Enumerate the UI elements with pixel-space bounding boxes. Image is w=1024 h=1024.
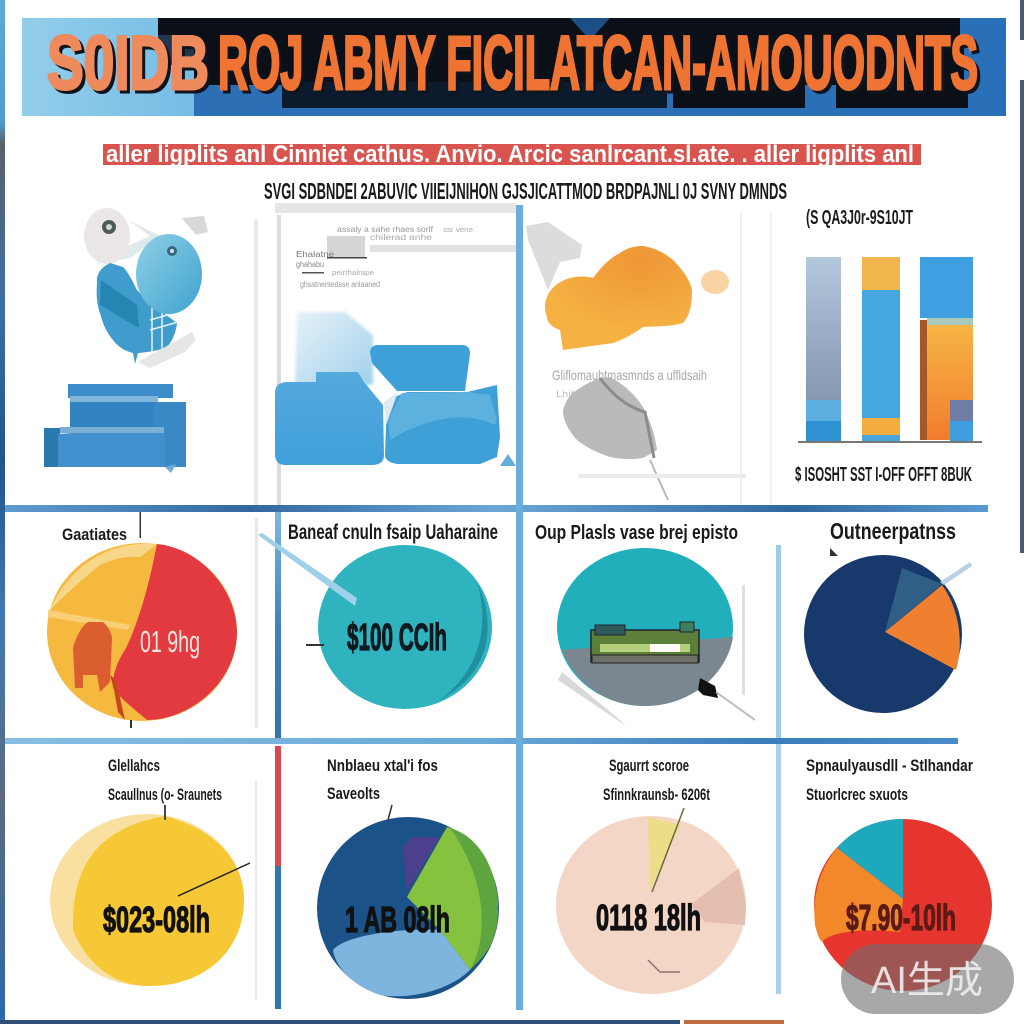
small arrow <box>500 454 516 466</box>
right blue folder <box>385 385 500 464</box>
bar 2 <box>862 257 900 442</box>
watermark: AI生成 <box>871 960 983 1002</box>
panel: pie red orange teal <box>806 756 992 991</box>
tiny captions block: ghahabu <box>296 260 324 269</box>
watermark <box>841 944 1014 1014</box>
icon: pale orange dot <box>701 270 729 294</box>
pie <box>317 817 499 999</box>
pie <box>804 555 962 713</box>
bar 1 <box>806 257 841 442</box>
clamp icon <box>698 678 718 698</box>
panel: orange blob illustration <box>526 222 746 500</box>
panel: pie teal and grey with train <box>535 522 755 726</box>
heading: Oup Plasls vase brej episto <box>535 522 738 544</box>
heading <box>108 756 222 804</box>
value label: $100 CCIh <box>347 617 447 659</box>
value label: 0118 18lh <box>596 897 701 938</box>
icon: grey lens disc <box>84 208 208 264</box>
faint noisy caption: Gliflomauhtmasmnds a uffldsaih <box>552 367 707 383</box>
icon: orange blob <box>545 246 692 350</box>
panel: pie navy green blue <box>317 756 499 999</box>
grid lines <box>5 205 988 1010</box>
icon: green train <box>591 622 699 663</box>
pie <box>814 819 992 991</box>
panel: pie navy and orange <box>804 518 972 713</box>
leader line <box>652 808 684 892</box>
chart heading: (S QA3J0r-9S10JT <box>806 207 913 229</box>
pie <box>556 816 746 994</box>
value label: 1 AB 08lh <box>345 899 450 940</box>
panel: stacked bar chart <box>795 207 982 486</box>
subtitle ribbon: aller ligplits anl Cinniet cathus. Anvio. Arcic sanlrcant.sl.ate. . aller ligplits anl <box>106 141 914 168</box>
heading <box>806 756 973 804</box>
heading: Stuorlcrec sxuots <box>806 785 908 804</box>
icon: stacked blue boxes <box>44 384 186 473</box>
heading: Scaullnus (o- Sraunets <box>108 785 222 804</box>
panel: pie peach <box>556 756 746 994</box>
faint caption line two: Lhifsunnadh <box>556 389 616 399</box>
heading: Outneerpatnss <box>830 518 956 544</box>
tiny captions block: chilerad anhe <box>370 233 433 242</box>
tiny captions block: ghsatnentedsse anlaaned <box>300 280 380 289</box>
heading: Gaatiates <box>62 525 127 544</box>
value label: 01 9hg <box>140 624 200 659</box>
panel: eye and boxes illustration <box>44 208 208 473</box>
pointer <box>258 533 357 606</box>
tiny captions block: ssr vene <box>443 227 473 234</box>
decorative strokes <box>558 585 755 726</box>
panel: pie yellow <box>50 756 250 986</box>
heading: Baneaf cnuln fsaip Uaharaine <box>288 521 498 544</box>
back blue folder <box>370 345 470 391</box>
value label: $7.90-10lh <box>846 897 956 938</box>
tiny captions block: peirthalrape <box>332 270 374 277</box>
heading: Spnaulyausdll - Stlhandar <box>806 756 973 775</box>
bar 3 <box>920 257 973 442</box>
tiny captions block: Ehalatne <box>296 250 335 259</box>
panel: pie teal <box>258 521 498 709</box>
title banner <box>22 18 1006 116</box>
heading: Saveolts <box>327 784 380 803</box>
pie <box>47 543 237 721</box>
heading <box>327 756 438 803</box>
leader line <box>178 863 250 896</box>
panel: blue folders illustration <box>275 203 516 466</box>
left edge stripe <box>0 0 5 1024</box>
heading: Sgaurrt scoroe <box>609 756 689 775</box>
pale folder <box>295 312 373 385</box>
heading: Nnblaeu xtal'i fos <box>327 756 438 775</box>
left blue folder <box>275 372 384 465</box>
pie <box>318 545 492 709</box>
heading: Glellahcs <box>108 756 160 775</box>
icon: blue figure body <box>97 263 196 368</box>
grey sketch <box>526 222 582 290</box>
tiny captions block <box>296 225 473 289</box>
pie <box>557 548 733 706</box>
tiny captions block: assaly a sahe rhaes sorlf <box>337 225 434 234</box>
value label: $023-08lh <box>103 899 210 940</box>
heading: Sfinnkraunsb- 6206t <box>603 785 710 804</box>
bottom edge stripe <box>0 1020 784 1024</box>
heading <box>603 756 710 804</box>
bull silhouette <box>73 622 112 692</box>
axis <box>798 441 982 443</box>
panel: pie yellow and red <box>47 512 237 728</box>
right edge stripe <box>1020 0 1024 553</box>
banner title text: S0IDB <box>47 21 209 106</box>
icon: blue ball <box>136 234 202 314</box>
icon: grey disc <box>563 377 746 500</box>
pie <box>50 814 244 986</box>
leader line <box>388 805 392 820</box>
banner title text: S0IDB <box>50 24 212 109</box>
